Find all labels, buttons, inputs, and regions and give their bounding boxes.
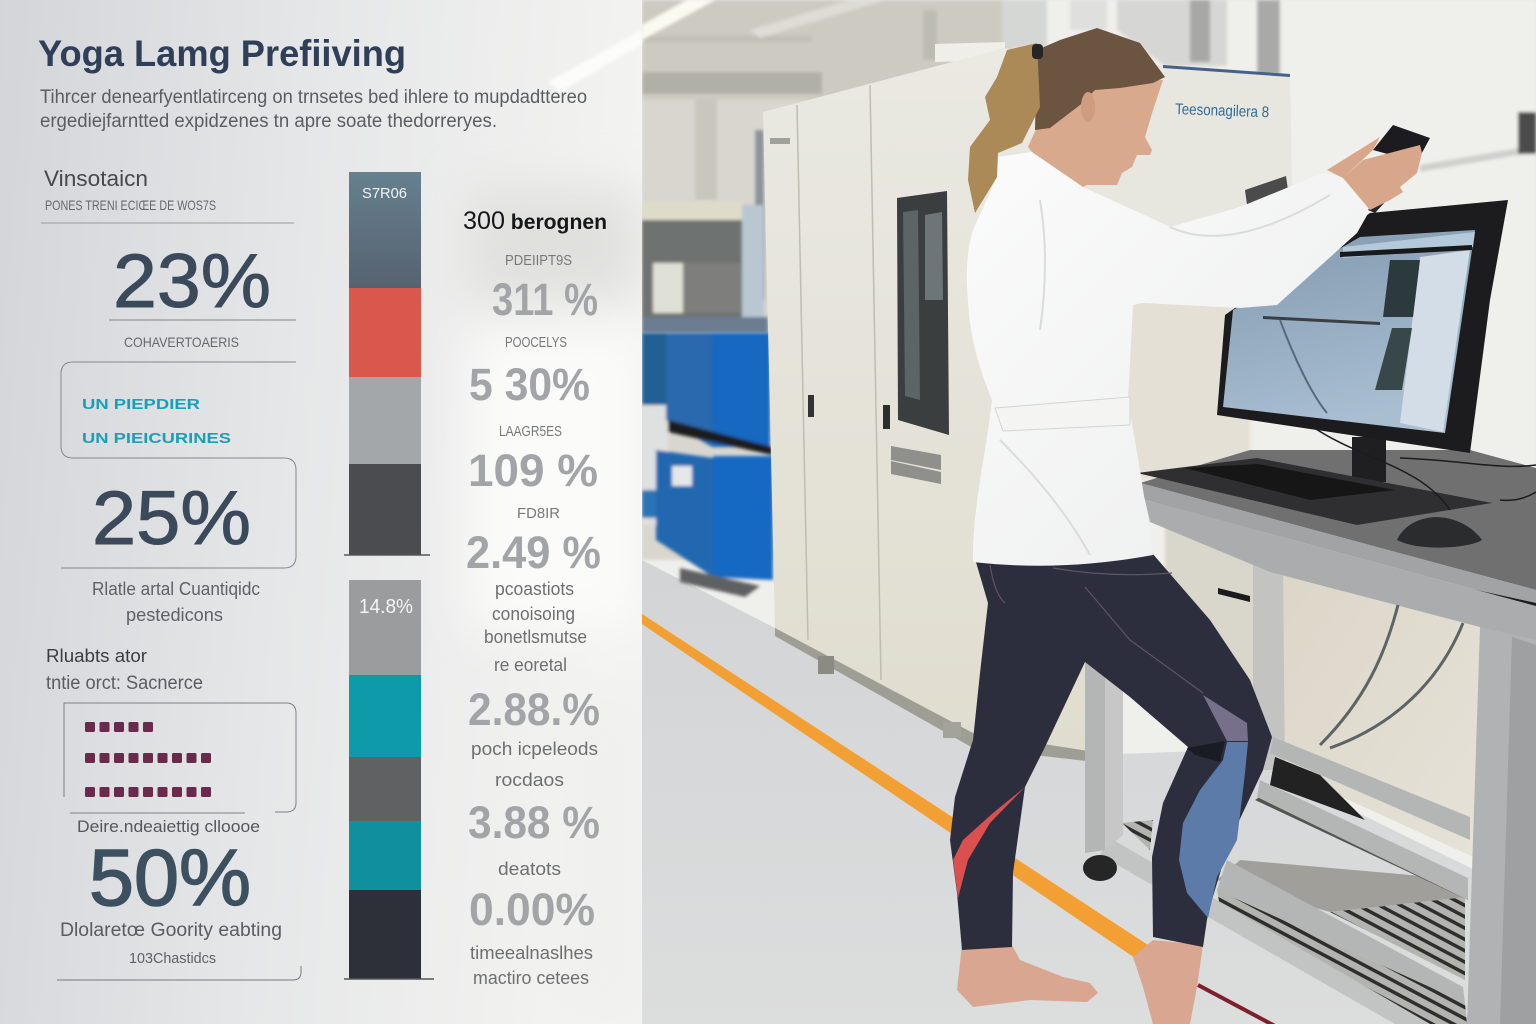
stat group 3: 109 % [468, 445, 598, 496]
photo: laboratory scene [642, 0, 1536, 1024]
stat: 23 percent: 23% [113, 239, 271, 324]
stat group 2: POOCELYS [505, 334, 567, 351]
section subheading: tntie orct: Sacnerce [46, 673, 203, 694]
column heading: 300 berognen [463, 207, 607, 235]
stat description: conoisoing [492, 604, 575, 624]
woman in white jacket and leggings [950, 28, 1430, 1024]
stat description: Rlatle artal Cuantiqidc [92, 579, 260, 599]
stat group 6 [468, 797, 600, 879]
ruched knee [1187, 741, 1225, 762]
stat caption: COHAVERTOAERIS [124, 334, 239, 350]
stat group 2 [469, 334, 590, 410]
stat group 7: timeealnaslhes [470, 943, 593, 963]
grey equipment [642, 202, 768, 333]
stat description: bonetlsmutse [484, 627, 587, 647]
stat group 5: 2.88.% [468, 684, 600, 735]
section heading: Vinsotaicn [44, 166, 148, 191]
teal label: UN PIEICURINES [82, 430, 231, 447]
stat heading: Deire.ndeaiettig clloooe [77, 817, 260, 836]
teal label: UN PIEPDIER [82, 396, 200, 413]
stat group 3: LAAGR5ES [499, 423, 562, 440]
stacked bar chart: upper [344, 172, 430, 555]
brown hair [1035, 28, 1165, 130]
bar label: 14.8% [359, 596, 413, 618]
black leggings [950, 552, 1272, 950]
floor [642, 560, 1536, 1024]
stat: 25 percent: 25% [92, 476, 251, 561]
title: Yoga Lamg Prefiiving [38, 33, 406, 74]
stat description: pcoastiots [495, 579, 574, 599]
red floor cable [1198, 985, 1275, 1024]
stacked bar chart: lower [344, 580, 434, 979]
feet [957, 940, 1203, 1024]
section heading: Rluabts ator [46, 646, 147, 666]
stat group 1 [492, 252, 598, 325]
stat group 3 [468, 423, 598, 496]
stat description: Dlolaretœ Goority eabting [60, 920, 282, 941]
stat description [484, 579, 587, 675]
white upper box with brand label [1090, 65, 1292, 242]
bench rails [1270, 737, 1470, 840]
intro text: Tihrcer denearfyentlatirceng on trnsetes bed ihlere to mupdadttereo [40, 87, 587, 108]
maroon square rows [85, 722, 211, 797]
jacket folds [1000, 195, 1330, 555]
stat group 1: PDEIIPT9S [505, 252, 572, 269]
phone [1373, 125, 1430, 162]
panel: translucent statistics panel [0, 0, 650, 1024]
stat group 7: mactiro cetees [473, 968, 589, 988]
leggings seams [990, 565, 1203, 693]
computer monitor [1137, 200, 1536, 525]
bench front leg [1467, 627, 1536, 1024]
cables under bench [1320, 605, 1463, 748]
stat group 7: 0.00% [469, 884, 595, 935]
stat description: re eoretal [494, 655, 567, 675]
stat group 7 [469, 884, 595, 988]
callout box: teal labels and 25 percent [61, 362, 296, 568]
stat group 5: rocdaos [495, 770, 564, 790]
bar label: S7R06 [362, 185, 407, 202]
curly ponytail [968, 43, 1040, 213]
stat description: pestedicons [126, 605, 223, 625]
stat: 50 percent: 50% [89, 833, 251, 922]
intro text: ergediejfarntted expidzenes tn apre soate thedorreryes. [40, 111, 497, 132]
right column of statistics [463, 207, 607, 988]
section subheading: PONES TRENI ECIŒE DE WOS7S [45, 197, 216, 213]
faint background shapes [470, 186, 642, 618]
bench rear leg [1253, 556, 1285, 770]
stat group 5: poch icpeleods [471, 739, 598, 759]
stat group 4: 2.49 % [466, 527, 601, 578]
stat group 2: 5 30% [469, 359, 590, 410]
white jacket [967, 152, 1370, 566]
blue leggings panel [1179, 742, 1248, 918]
stat description [92, 579, 260, 625]
lab bench [1083, 450, 1536, 1024]
shelf stripes [1122, 790, 1536, 1024]
blue storage cabinets [642, 333, 773, 597]
ceiling light reflection [548, 30, 642, 92]
neck and face [1028, 80, 1163, 187]
orange floor line [642, 614, 1148, 958]
hair tie [1032, 44, 1043, 59]
striped knee panel [1203, 695, 1248, 741]
stat group 5 [468, 684, 600, 790]
stat group 4: FD8IR [517, 505, 560, 522]
bench table top [1140, 450, 1536, 590]
cream wall under bench [1283, 565, 1480, 860]
jacket belt [995, 397, 1130, 431]
stat footnote: 103Chastidcs [129, 950, 216, 967]
intro text [40, 87, 587, 132]
computer mouse [1397, 517, 1482, 548]
brand label text: Teesonagilera 8 [1175, 101, 1269, 121]
stat group 1: 311 % [492, 274, 598, 325]
panel background [0, 0, 642, 1024]
lab wall and ceiling [642, 0, 1536, 1024]
stat group 6: deatots [498, 859, 561, 879]
ear [1081, 92, 1095, 122]
large white machine cabinet [763, 42, 1095, 762]
stat group 6: 3.88 % [468, 797, 600, 848]
stat group 4 [466, 505, 601, 578]
red leggings stripe [953, 787, 1025, 898]
section: first statistic [41, 166, 296, 350]
section: dot rows and 50 percent [46, 646, 301, 980]
hands [1327, 137, 1422, 210]
